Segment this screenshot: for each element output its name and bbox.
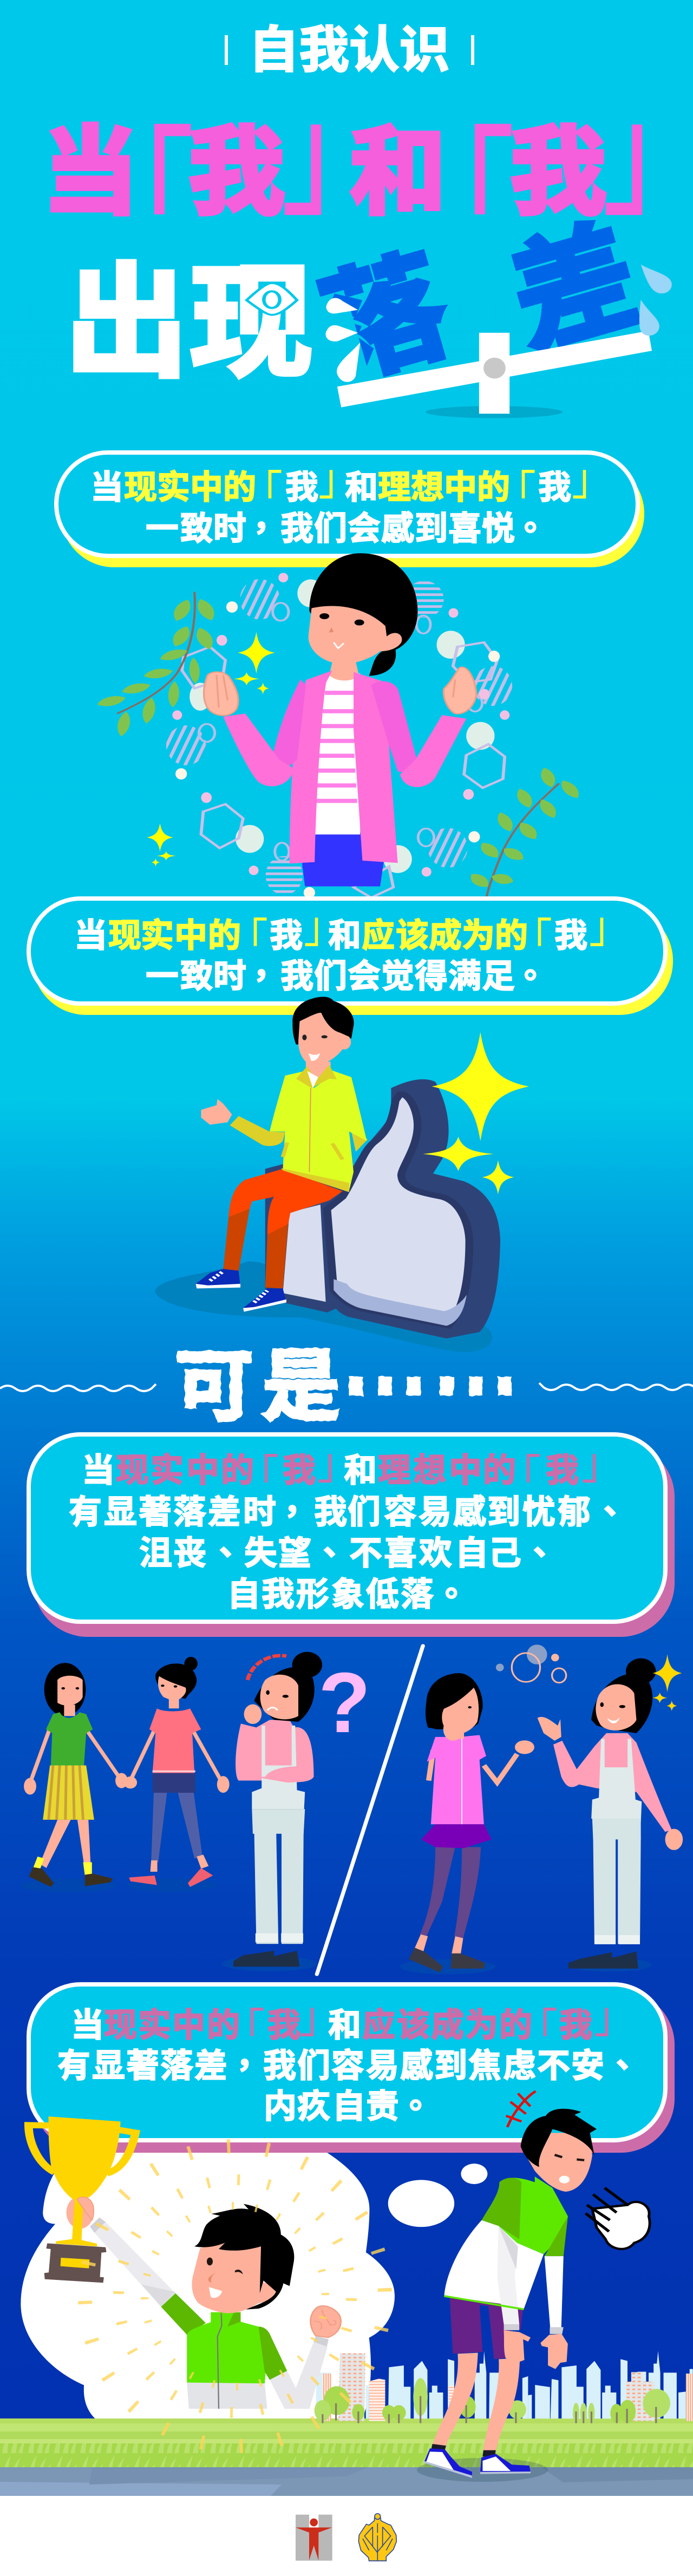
illustration: tired boy bbox=[388, 2091, 650, 2482]
decoration: rings bbox=[199, 603, 482, 861]
text: bubble 4: 」 bbox=[299, 1992, 340, 2042]
text: bubble 2 bbox=[74, 902, 630, 994]
text: bubble 4: 内疚自责。 bbox=[264, 2088, 432, 2125]
title line 1: 「 bbox=[85, 117, 193, 268]
title line 2: 出现: 出 bbox=[65, 255, 188, 392]
title line 2: 出现: 现 bbox=[189, 255, 313, 392]
boy head bbox=[292, 997, 354, 1065]
divider line bbox=[317, 1646, 423, 1974]
text: bubble 1: 一致时，我们会感到喜悦。 bbox=[146, 510, 547, 547]
thumb lower left bbox=[283, 1204, 326, 1302]
woman overalls talking bbox=[538, 1654, 683, 1969]
trophy hand bbox=[67, 2196, 106, 2233]
icon: sparkles bbox=[147, 632, 275, 867]
woman green bbox=[24, 1663, 128, 1887]
text: bubble 1: 」 bbox=[572, 455, 612, 504]
text: bubble 1: 」 bbox=[318, 455, 359, 504]
decorative wave left bbox=[0, 1384, 156, 1391]
icon: eye bbox=[246, 283, 297, 315]
decoration: hexagons bbox=[182, 643, 505, 897]
text: bubble 3: 沮丧、失望、不喜欢自己、 bbox=[139, 1535, 556, 1571]
text: bubble 3: 「 bbox=[238, 1451, 279, 1501]
logo: hands bbox=[358, 2514, 396, 2561]
girl neck bbox=[329, 661, 359, 680]
decoration: pale circles bbox=[189, 579, 494, 873]
text: question mark: ? bbox=[318, 1655, 371, 1751]
icon: sparkles bbox=[423, 1032, 529, 1194]
text: bubble 4: 「 bbox=[224, 2005, 265, 2055]
title line 2: 出现 bbox=[65, 255, 313, 392]
boy shoes bbox=[196, 1269, 286, 1312]
jacket bbox=[187, 2312, 287, 2409]
boy neck bbox=[306, 1061, 331, 1079]
boy arm and hand bbox=[201, 1099, 368, 1152]
text: bubble 4: 和 bbox=[328, 2007, 361, 2043]
text: bubble 3: 」 bbox=[317, 1439, 358, 1489]
girl hands bbox=[204, 667, 476, 716]
woman magenta bbox=[409, 1673, 534, 1972]
thumb side bbox=[265, 1079, 500, 1339]
title line 1: 我 bbox=[188, 119, 285, 226]
text: bubble 3: 「 bbox=[500, 1451, 541, 1501]
text: bubble 2: 我 bbox=[270, 917, 303, 954]
text: bubble 1 bbox=[90, 455, 612, 547]
heading: 可是……: 可 bbox=[175, 1342, 254, 1431]
title line 1: 」 bbox=[282, 80, 390, 231]
boy jacket bbox=[270, 1065, 367, 1192]
text: bubble 4: 「 bbox=[517, 2005, 558, 2055]
text: bubble 1: 我 bbox=[538, 469, 571, 506]
panel: bubble 3 shadow bbox=[34, 1443, 675, 1637]
boy legs bbox=[223, 1169, 343, 1288]
trophy bbox=[29, 2116, 135, 2283]
illustration: winner boy with trophy bbox=[29, 2116, 341, 2409]
legs and shorts bbox=[424, 2298, 568, 2478]
girl pants bbox=[298, 833, 388, 887]
panel: bubble 1 shadow bbox=[61, 460, 644, 567]
text: bubble 1: 当 bbox=[90, 469, 123, 506]
text: bubble 2: 现实中的 bbox=[108, 917, 241, 954]
text: bubble 4 bbox=[57, 1992, 639, 2125]
icon: stress mark bbox=[506, 2091, 535, 2127]
panel: bubble 4 shadow bbox=[34, 1991, 675, 2153]
girl hair back bbox=[309, 553, 417, 676]
title line 1: 我 bbox=[510, 119, 606, 226]
shadow bbox=[417, 2458, 548, 2482]
title: 落 tilted: 落 bbox=[308, 237, 463, 402]
text: bubble 4: 应该成为的 bbox=[362, 2007, 532, 2043]
girl face bbox=[309, 606, 402, 664]
title line 1: 和 bbox=[350, 119, 446, 226]
illustration: boy on thumbs up bbox=[155, 997, 529, 1352]
text: bubble 1: 现实中的 bbox=[124, 469, 256, 506]
branch right bbox=[466, 766, 583, 899]
head bbox=[192, 2204, 294, 2313]
panel: bubble 3 bbox=[29, 1434, 665, 1622]
text: bubble 1: 「 bbox=[242, 467, 283, 517]
upper body bbox=[444, 2091, 650, 2334]
text: bubble 4: 」 bbox=[594, 1992, 635, 2042]
rays around winner bbox=[77, 2139, 393, 2454]
text: bubble 3: 」 bbox=[581, 1439, 622, 1489]
text: bubble 3: 我 bbox=[546, 1452, 579, 1489]
title line 1: 当 bbox=[42, 119, 139, 226]
text: bubble 3: 有显著落差时，我们容易感到忧郁、 bbox=[69, 1493, 626, 1530]
heading: 可是……: …… bbox=[339, 1289, 521, 1420]
thumb shade bbox=[334, 1279, 467, 1326]
text: bubble 3: 理想中的 bbox=[378, 1452, 516, 1489]
text: bubble 1: 我 bbox=[285, 469, 318, 506]
text: bubble 4: 我 bbox=[559, 2007, 592, 2043]
text: bubble 2: 一致时，我们会觉得满足。 bbox=[146, 958, 547, 994]
label: 自我认识: 自我认识 bbox=[249, 23, 449, 78]
title line 1 bbox=[42, 80, 693, 268]
other arm bbox=[270, 2306, 341, 2409]
girl shirt bbox=[315, 673, 360, 835]
text: bubble 1: 理想中的 bbox=[378, 469, 510, 506]
seesaw with drops bbox=[325, 265, 672, 418]
branch left bbox=[95, 592, 218, 737]
text: bubble 2: 「 bbox=[227, 915, 268, 965]
icon: sigh puff bbox=[592, 2202, 650, 2249]
thought bubbles bbox=[388, 2164, 487, 2227]
ground: grass bbox=[0, 2418, 693, 2467]
panel: bubble 4 bbox=[29, 1984, 665, 2140]
girl cardigan bbox=[223, 671, 466, 863]
illustration: happy girl with decorations bbox=[95, 553, 583, 899]
title line 1: 「 bbox=[406, 117, 514, 268]
woman overalls thinking bbox=[233, 1652, 322, 1967]
text: bubble 2: 」 bbox=[589, 902, 630, 952]
raised arm bbox=[94, 2222, 206, 2335]
text: bubble 2: 和 bbox=[328, 917, 361, 954]
thought circles bbox=[496, 1644, 566, 1683]
panel: bubble 2 shadow bbox=[32, 907, 673, 1015]
text: bubble 2: 应该成为的 bbox=[362, 917, 528, 954]
text: bubble 1: 「 bbox=[495, 467, 536, 517]
text: bubble 3 bbox=[69, 1439, 626, 1613]
cloud behind winner bbox=[21, 2153, 395, 2418]
text: bubble 2: 当 bbox=[74, 917, 107, 954]
panel: bubble 1 bbox=[56, 453, 638, 556]
text: bubble 4: 有显著落差，我们容易感到焦虑不安、 bbox=[57, 2047, 639, 2084]
text: bubble 4: 当 bbox=[71, 2007, 104, 2043]
trees bbox=[315, 2378, 670, 2424]
text: bubble 2: 「 bbox=[512, 915, 552, 965]
skyline bbox=[315, 2351, 693, 2424]
text: bubble 3: 现实中的 bbox=[116, 1452, 254, 1489]
text: bubble 4: 现实中的 bbox=[104, 2007, 240, 2043]
panel: bubble 2 bbox=[29, 899, 665, 1004]
heading: 可是……: 是 bbox=[261, 1342, 341, 1431]
text: bubble 3: 当 bbox=[82, 1452, 115, 1489]
decoration: dots bbox=[172, 573, 509, 898]
ground: road bbox=[0, 2467, 693, 2496]
shadow bbox=[155, 1261, 492, 1352]
woman pink shirt bbox=[124, 1657, 230, 1887]
icon: sigh motion lines bbox=[586, 2188, 627, 2232]
text: bubble 2: 」 bbox=[304, 902, 344, 952]
text: bubble 2: 我 bbox=[554, 917, 587, 954]
decorative wave right bbox=[539, 1383, 693, 1390]
text: bubble 1: 和 bbox=[345, 469, 378, 506]
text: bubble 3: 自我形象低落。 bbox=[227, 1576, 468, 1613]
text: bubble 3: 和 bbox=[344, 1452, 377, 1489]
title: 差 tilted: 差 bbox=[496, 205, 652, 370]
decoration: striped circles bbox=[166, 579, 512, 895]
heading: 可是…… bbox=[175, 1289, 521, 1431]
shadows bbox=[20, 1878, 652, 1974]
text: bubble 3: 我 bbox=[283, 1452, 316, 1489]
thumb face bbox=[327, 1094, 469, 1326]
logo: figure bbox=[296, 2515, 332, 2561]
white lower jacket bbox=[187, 2383, 267, 2409]
text: bubble 4: 我 bbox=[267, 2007, 300, 2043]
illustration: comparing with others bbox=[20, 1644, 683, 1974]
